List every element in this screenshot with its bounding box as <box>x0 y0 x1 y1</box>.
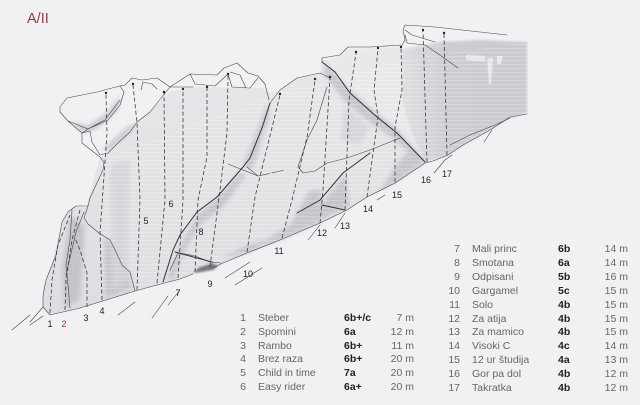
route numbers <box>47 169 452 329</box>
outlines <box>12 25 527 330</box>
shaded patches <box>62 62 425 308</box>
route table: right column: Za atija <box>472 313 507 325</box>
route numbers: 11 <box>274 246 284 256</box>
route table: left column: 6b+/c <box>344 312 371 324</box>
route table: right column: 12 <box>448 313 460 325</box>
rock wall: right section <box>400 40 527 162</box>
route table: right column: 6a <box>558 257 570 269</box>
route table: right column: 6b <box>558 243 570 255</box>
route table: right column: 4a <box>558 354 570 366</box>
route numbers: 2 <box>61 319 67 329</box>
route numbers: 15 <box>392 190 402 200</box>
route table: right column: Smotana <box>472 257 514 269</box>
route numbers: 12 <box>317 228 327 238</box>
route table: right column: Takratka <box>472 382 512 394</box>
route numbers: 14 <box>363 204 373 214</box>
route table: left column: Child in time <box>258 367 316 379</box>
route table: left column: Brez raza <box>258 353 303 365</box>
route table: right column: 14 m <box>605 243 628 255</box>
route table: right column: 4b <box>558 326 570 338</box>
route table: left column: 20 m <box>391 353 414 365</box>
route numbers: 10 <box>243 269 253 279</box>
route numbers: 6 <box>168 199 174 209</box>
ledge cracks <box>163 62 425 282</box>
route table: right column <box>448 243 628 394</box>
route table: left column: 6a <box>344 326 356 338</box>
rock face diagram <box>12 25 527 330</box>
route numbers: 1 <box>47 319 53 329</box>
route table: left column: 12 m <box>391 326 414 338</box>
route table: left column: 6a+ <box>344 381 362 393</box>
route table: right column: 5b <box>558 271 570 283</box>
route numbers: 8 <box>198 227 204 237</box>
route numbers: 5 <box>143 216 149 226</box>
route table: right column: Solo <box>472 299 493 311</box>
route table: left column: 7a <box>344 367 356 379</box>
route table: right column: 14 <box>448 340 460 352</box>
route numbers: 9 <box>207 279 213 289</box>
route table: right column: 12 ur študija <box>472 354 529 366</box>
pale drip streak <box>487 58 493 84</box>
route table: right column: 4b <box>558 299 570 311</box>
horizontal print stripes <box>100 42 527 291</box>
route table: right column: Mali princ <box>472 243 517 255</box>
route table: right column: 10 <box>448 285 460 297</box>
route numbers: 17 <box>442 169 452 179</box>
route table: left column: Steber <box>258 312 289 324</box>
title: A/II <box>27 11 49 27</box>
route table: left column <box>240 312 414 393</box>
route table: right column: 15 m <box>605 285 628 297</box>
route table: right column: 4b <box>558 368 570 380</box>
climbing routes <box>50 30 447 313</box>
route table: right column: 15 m <box>605 299 628 311</box>
route table: right column: 8 <box>454 257 460 269</box>
route table: left column: Easy rider <box>258 381 306 393</box>
route table: left column: 5 <box>240 367 246 379</box>
route numbers: 13 <box>340 221 350 231</box>
route table: right column: 4c <box>558 340 570 352</box>
route table: right column: 15 m <box>605 313 628 325</box>
route table: right column: 15 <box>448 354 460 366</box>
route table: right column: 11 <box>449 299 460 311</box>
route numbers: 3 <box>83 313 89 323</box>
route table: left column: Spomini <box>258 326 296 338</box>
route table: left column: 6 <box>240 381 246 393</box>
route table: left column: 6b+ <box>344 340 362 352</box>
route table: left column: 20 m <box>391 367 414 379</box>
route table: right column: Za mamico <box>472 326 524 338</box>
rock wall: upper light face <box>324 47 422 158</box>
route table: left column: 1 <box>240 312 246 324</box>
route table: right column: 16 <box>448 368 460 380</box>
route table: right column: Odpisani <box>472 271 513 283</box>
route table: left column: 2 <box>240 326 246 338</box>
route table: right column: Visoki C <box>472 340 511 352</box>
route table: left column: 6b+ <box>344 353 362 365</box>
route table: right column: Gor pa dol <box>472 368 521 380</box>
route table: right column: 17 <box>448 382 460 394</box>
route table: right column: 14 m <box>605 257 628 269</box>
route table: left column: 20 m <box>391 381 414 393</box>
route table: right column: 9 <box>454 271 460 283</box>
route numbers: 7 <box>175 288 181 298</box>
route table: right column: 12 m <box>605 368 628 380</box>
route numbers: 4 <box>99 306 105 316</box>
route table: right column: 13 <box>448 326 460 338</box>
route table: left column: 3 <box>240 340 246 352</box>
route table: right column: 7 <box>454 243 460 255</box>
route table: right column: 5c <box>558 285 570 297</box>
route table: left column: 11 m <box>391 340 414 352</box>
rock wall: left section <box>43 60 425 315</box>
dark ledge block <box>194 263 218 273</box>
route table: right column: 14 m <box>605 340 628 352</box>
route numbers: 16 <box>421 175 431 185</box>
route table: right column: 16 m <box>605 271 628 283</box>
route table: left column: 4 <box>240 353 246 365</box>
route table: right column: Gargamel <box>472 285 518 297</box>
route table: right column: 4b <box>558 382 570 394</box>
route table: left column: Rambo <box>258 340 292 352</box>
route table: right column: 4b <box>558 313 570 325</box>
route table: left column: 7 m <box>396 312 414 324</box>
route top anchors <box>105 29 445 95</box>
route table: right column: 15 m <box>605 326 628 338</box>
route table: right column: 13 m <box>605 354 628 366</box>
route table: right column: 12 m <box>605 382 628 394</box>
